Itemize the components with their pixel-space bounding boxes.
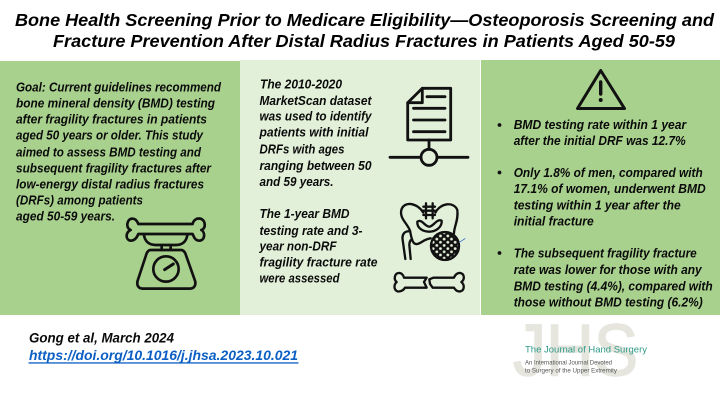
goal text: subsequent fragility fractures after	[16, 160, 212, 176]
result: subsequent fracture rate: rate was lower for those with any	[514, 262, 702, 277]
methods text: dataset: ranging between 50	[260, 158, 372, 173]
panel: results	[481, 60, 720, 315]
result: subsequent fracture rate	[498, 246, 713, 310]
goal text: bone mineral density (BMD) testing	[16, 96, 215, 111]
result: testing rate: BMD testing rate within 1 year	[514, 117, 687, 132]
goal text: aged 50 years or older. This study	[16, 128, 204, 143]
journal logo: An International Journal Devoted	[525, 359, 612, 366]
title: Fracture Prevention After Distal Radius Fractures in Patients Aged 50-59	[53, 31, 675, 51]
methods text: outcomes: year non-DRF	[259, 239, 337, 254]
title: Bone Health Screening Prior to Medicare Eligibility—Osteoporosis Screening and	[15, 10, 715, 30]
icon: document on network	[390, 88, 468, 165]
goal text: low-energy distal radius fractures	[16, 176, 204, 192]
methods text: dataset: The 2010-2020	[260, 76, 343, 91]
icon: pelvis with porous hip	[401, 203, 465, 260]
goal text: aged 50-59 years.	[16, 209, 115, 224]
title	[15, 10, 715, 51]
methods text: dataset: patients with initial	[259, 125, 369, 140]
result: subsequent fracture rate: those without BMD testing (6.2%)	[514, 295, 703, 310]
methods text: outcomes	[259, 206, 378, 286]
goal text: after fragility fractures in patients	[16, 112, 207, 127]
citation: Gong et al, March 2024	[29, 331, 174, 346]
result: men versus women: 17.1% of women, underwent BMD	[514, 181, 706, 196]
icon: fractured bone	[394, 273, 464, 291]
panel: goal	[0, 61, 240, 315]
goal text: (DRFs) among patients	[16, 193, 143, 208]
methods text: outcomes: The 1-year BMD	[260, 206, 350, 221]
citation	[28, 331, 298, 364]
methods text: outcomes: testing rate and 3-	[260, 223, 362, 238]
icon: bone on a weighing scale	[127, 218, 205, 289]
methods text: dataset: and 59 years.	[260, 174, 334, 189]
journal logo: The Journal of Hand Surgery	[525, 345, 647, 355]
goal text: aimed to assess BMD testing and	[16, 144, 202, 159]
methods text: dataset: was used to identify	[260, 109, 372, 124]
result: subsequent fracture rate: The subsequent fragility fracture	[514, 246, 697, 261]
methods text: outcomes: fragility fracture rate	[260, 255, 378, 270]
goal text	[16, 80, 222, 224]
methods text: dataset: MarketScan dataset	[260, 93, 372, 108]
result: men versus women: Only 1.8% of men, compared with	[514, 165, 703, 180]
methods text: dataset: DRFs with ages	[260, 142, 344, 157]
goal text: Goal: Current guidelines recommend	[16, 80, 222, 95]
result: testing rate	[498, 117, 687, 148]
result: testing rate: after the initial DRF was 12.7%	[514, 133, 686, 148]
methods text: dataset	[259, 76, 372, 189]
citation: https://doi.org/10.1016/j.jhsa.2023.10.021	[29, 348, 298, 363]
journal logo: to Surgery of the Upper Extremity	[525, 367, 618, 374]
result: men versus women	[498, 165, 706, 228]
panel: methods	[240, 60, 480, 315]
result: men versus women: initial fracture	[514, 214, 594, 228]
journal logo: JHS	[513, 310, 638, 392]
icon: warning triangle	[578, 70, 624, 108]
result: men versus women: testing within 1 year after the	[514, 197, 681, 212]
methods text: outcomes: were assessed	[260, 271, 340, 286]
